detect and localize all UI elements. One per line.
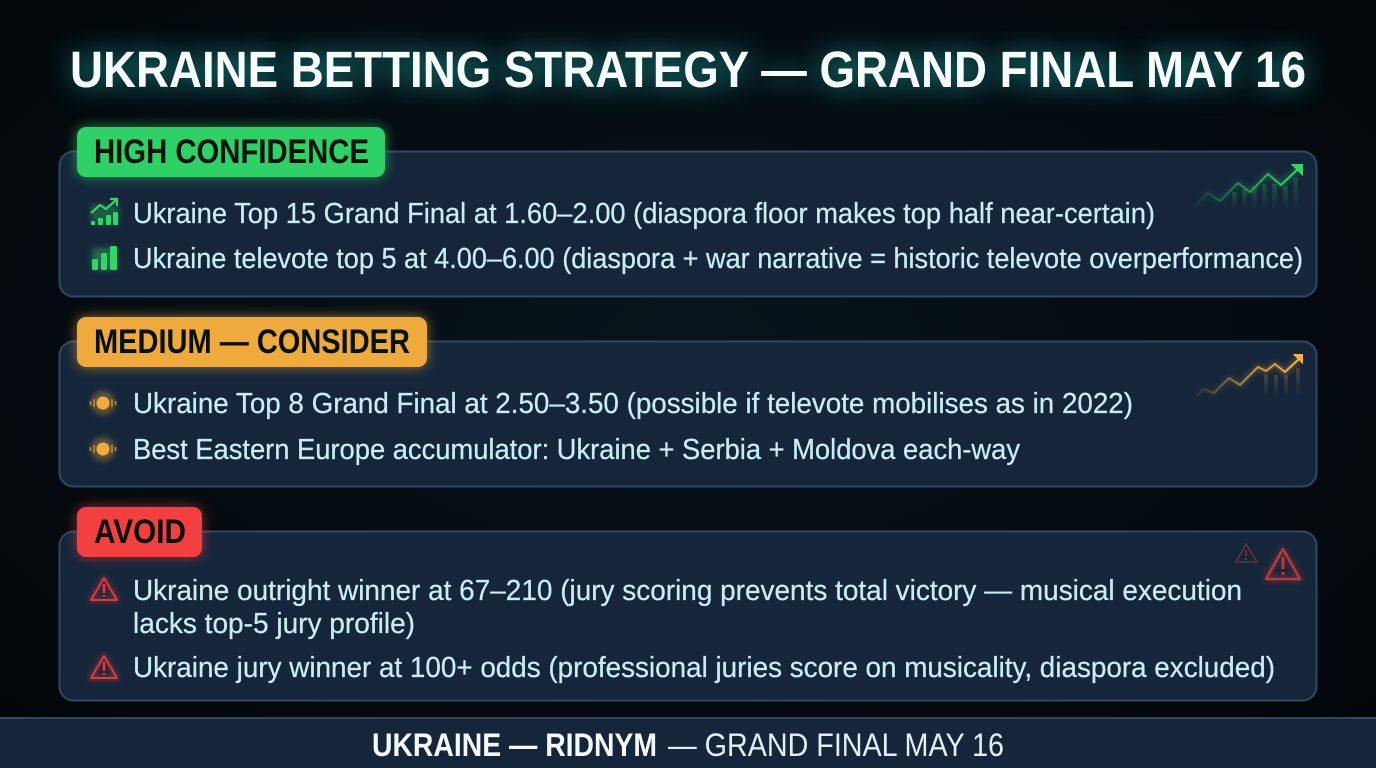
icon: signal bars: [92, 246, 117, 270]
badge: high confidence: [77, 127, 385, 177]
card background: high confidence: [60, 152, 1316, 296]
badge: high confidence: HIGH CONFIDENCE: [94, 133, 369, 171]
icon: corner warning triangles: [1236, 544, 1300, 579]
footer bar: — GRAND FINAL MAY 16: [668, 727, 1004, 763]
bullet: top 15: Ukraine Top 15 Grand Final at 1.60–2.00 (diaspora floor makes top half near-certain): [133, 198, 1155, 230]
sparkline: green rising arrow: [1193, 165, 1302, 209]
panel: high confidence: [60, 127, 1316, 296]
panel: avoid: [60, 507, 1316, 700]
bullet: outright winner: lacks top-5 jury profile): [133, 608, 415, 640]
badge: medium consider: MEDIUM — CONSIDER: [94, 323, 410, 361]
sparkline: amber rising arrow: [1195, 355, 1302, 397]
icon: warning triangle: [91, 578, 117, 600]
footer bar: [0, 718, 1376, 768]
card background: medium: [60, 342, 1316, 486]
bullet: jury winner: Ukraine jury winner at 100+ odds (professional juries score on musicality, diaspora excluded): [133, 652, 1275, 684]
card background: avoid: [60, 532, 1316, 700]
icon: warning triangle: [91, 656, 117, 678]
footer bar: UKRAINE — RIDNYM: [372, 727, 657, 763]
panel: medium consider: [60, 317, 1316, 486]
bullet: accumulator: Best Eastern Europe accumulator: Ukraine + Serbia + Moldova each-way: [133, 434, 1020, 466]
bullet: top 8: Ukraine Top 8 Grand Final at 2.50–3.50 (possible if televote mobilises as in 2022): [133, 388, 1133, 420]
badge: avoid: AVOID: [94, 513, 186, 551]
bullet: outright winner: [133, 575, 1242, 640]
badge: avoid: [77, 507, 202, 557]
icon: amber dot: [90, 437, 116, 461]
icon: rising chart: [91, 199, 119, 225]
bullet: televote: Ukraine televote top 5 at 4.00–6.00 (diaspora + war narrative = historic televote overperformance): [133, 243, 1303, 275]
badge: medium consider: [77, 317, 427, 367]
icon: amber dot: [90, 391, 116, 415]
bullet: outright winner: Ukraine outright winner at 67–210 (jury scoring prevents total victory — musical execution: [133, 575, 1242, 607]
